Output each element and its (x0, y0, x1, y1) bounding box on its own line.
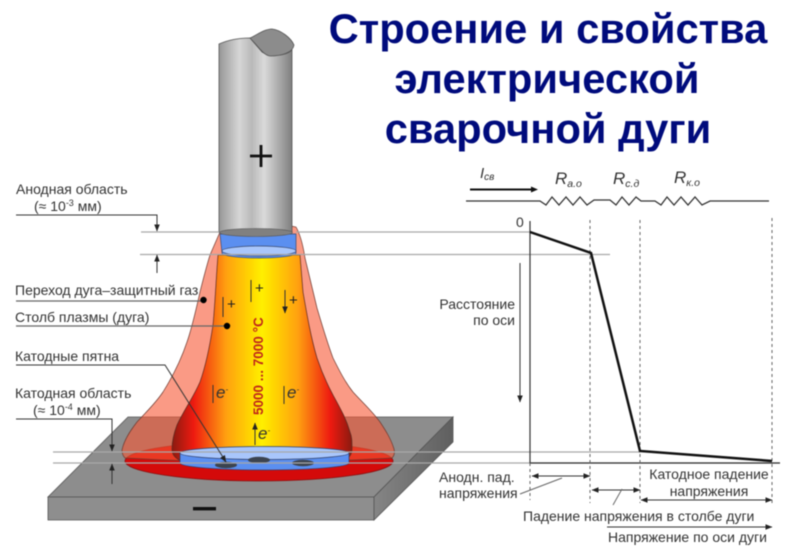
plus sign (250, 145, 272, 167)
workpiece plate (cathode) (48, 417, 453, 520)
title: Строение и свойства (329, 5, 768, 52)
minus sign (193, 507, 216, 510)
resistor labels: к.о (686, 177, 700, 189)
label: anode region (16, 181, 157, 273)
label: anode region: мм) (74, 198, 102, 214)
voltage distribution chart (439, 214, 780, 545)
molten pool (125, 441, 393, 481)
anode drop label: напряжения (439, 485, 518, 501)
label: plasma column: Столб плазмы (дуга) (15, 309, 149, 325)
label: anode region: -3 (66, 198, 74, 208)
current arrow: I (480, 165, 484, 182)
title: сварочной дуги (385, 105, 711, 152)
ion arrows and plus signs: + (227, 296, 236, 313)
label: cathode spots (15, 348, 226, 462)
voltage axis label: Напряжение по оси дуги (608, 529, 767, 545)
current arrow (470, 165, 538, 192)
electron arrows: - (225, 385, 228, 394)
cathode drop label (641, 466, 772, 500)
electron arrows (213, 383, 299, 445)
cathode drop label: Катодное падение (649, 466, 769, 482)
resistor labels: а.о (567, 178, 582, 190)
column drop label: Падение напряжения в столбе дуги (523, 508, 754, 524)
anode region disk (220, 234, 296, 258)
resistor labels: с.д (625, 178, 639, 190)
cathode spots (215, 457, 314, 468)
label: anode region: Анодная область (16, 181, 128, 197)
resistor labels: R (555, 169, 567, 188)
resistor labels (555, 168, 700, 190)
label: anode region: (≈ 10 (34, 198, 66, 214)
electron arrows: e (258, 424, 267, 443)
electrode (anode) (219, 29, 294, 236)
title (329, 5, 768, 152)
zone boundaries (530, 218, 772, 503)
label: arc to shielding gas transition: Переход дуга–защитный газ (15, 282, 198, 298)
voltage curve (530, 232, 772, 461)
electron arrows: e (287, 383, 296, 402)
current arrow: св (484, 172, 494, 183)
shielding gas envelope (122, 226, 394, 462)
distance label: по оси (473, 312, 515, 328)
temperature label: 5000 ... 7000 °C (251, 317, 266, 415)
electron arrows: e (216, 383, 225, 402)
label: plasma column (15, 309, 230, 329)
distance label (439, 296, 515, 328)
distance axis arrow (519, 263, 521, 402)
equivalent circuit (466, 165, 769, 205)
cathode region disk with spots (180, 446, 349, 470)
plasma column (172, 255, 352, 461)
label: cathode region (15, 385, 131, 484)
label: cathode region: мм) (73, 402, 101, 418)
label: cathode spots: Катодные пятна (15, 348, 119, 364)
cathode drop label: напряжения (670, 483, 748, 499)
electron arrows: - (267, 426, 270, 435)
distance label: Расстояние (439, 296, 515, 312)
column drop label (523, 489, 754, 524)
title: электрической (395, 55, 699, 102)
ion arrows and plus signs: + (255, 280, 264, 297)
resistor labels: R (613, 169, 625, 188)
label: cathode region: -4 (65, 402, 73, 412)
axes (530, 221, 780, 463)
voltage distribution chart: 0 (516, 214, 524, 230)
anode drop label: Анодн. пад. (439, 469, 515, 485)
label: cathode region: Катодная область (15, 385, 131, 401)
electron arrows: - (296, 385, 299, 394)
anode drop label (439, 469, 590, 501)
resistor labels: R (674, 168, 686, 187)
ion arrows and plus signs (223, 280, 298, 317)
ion arrows and plus signs: + (289, 292, 298, 309)
label: cathode region: (≈ 10 (33, 402, 65, 418)
horizontal reference lines (53, 232, 780, 463)
